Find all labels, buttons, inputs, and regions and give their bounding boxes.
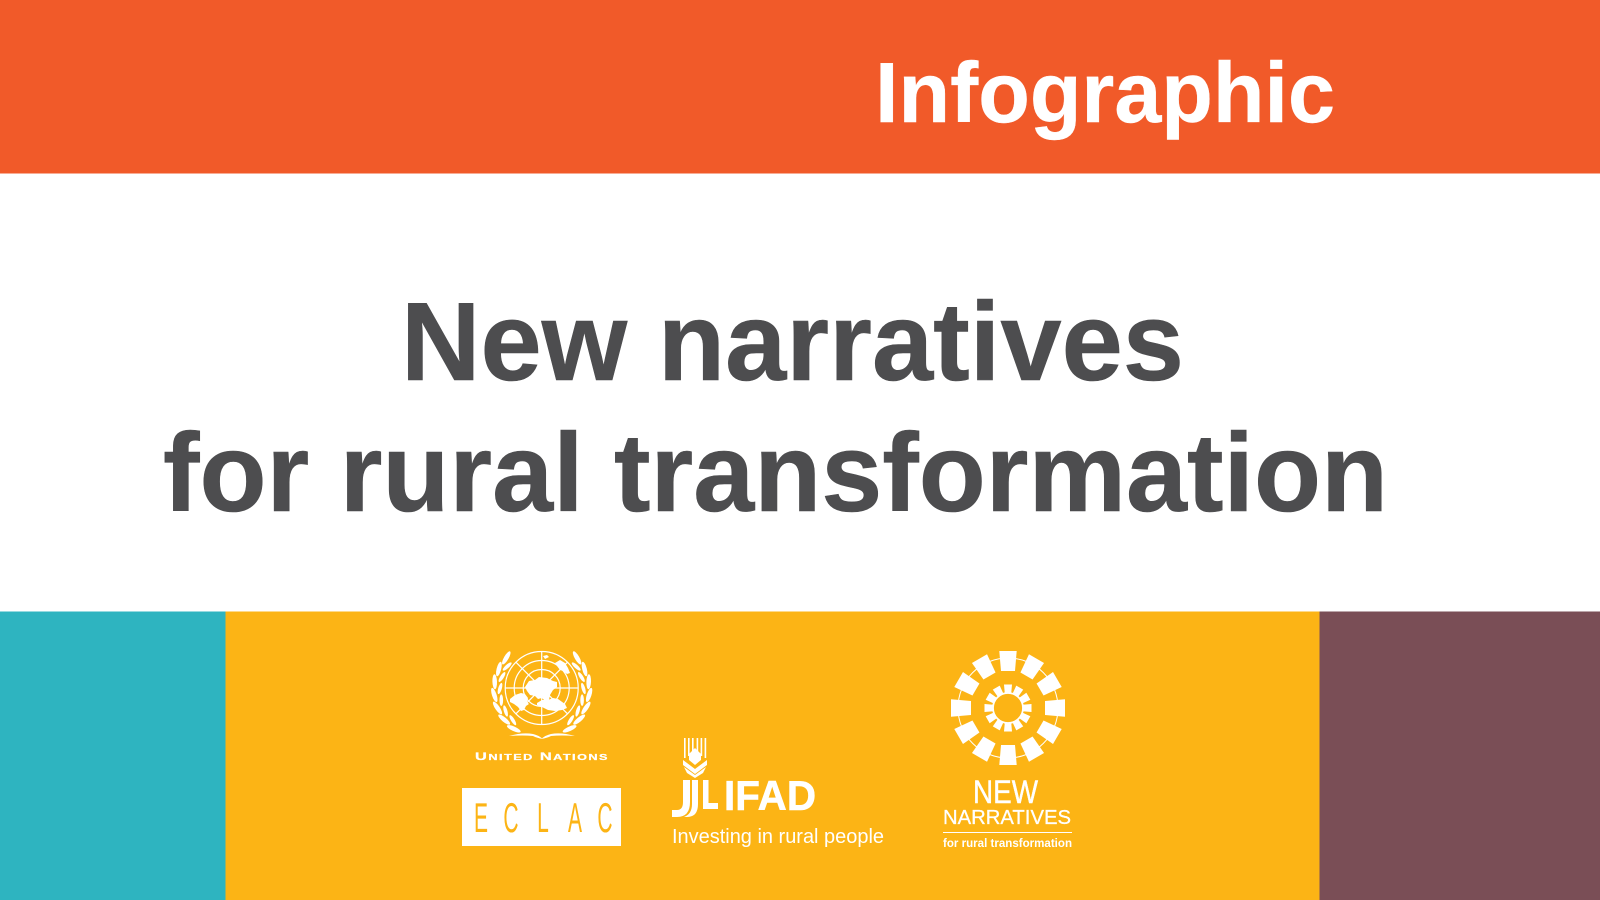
logo: New Narratives	[943, 651, 1072, 850]
panel: top orange banner	[0, 0, 1600, 174]
icon: ring of tiles	[951, 651, 1065, 765]
logo: IFAD	[672, 738, 884, 848]
text: IFAD: IFAD	[724, 772, 816, 819]
text: NARRATIVES: NARRATIVES	[943, 807, 1071, 829]
text: United Nations: U NITED N ATIONS	[475, 751, 609, 763]
title: New narratives for rural transformation: New narratives	[401, 280, 1184, 404]
text: ECLAC: ECLAC	[474, 795, 613, 842]
panel: yellow footer block	[226, 612, 1320, 900]
text: for rural transformation: for rural transformation	[943, 836, 1072, 850]
heading: Infographic: Infographic	[875, 46, 1335, 141]
panel: teal footer block	[0, 612, 226, 900]
logo: United Nations emblem	[475, 650, 609, 763]
title: New narratives for rural transformation: for rural transformation	[163, 411, 1388, 535]
text: NEW: NEW	[973, 774, 1039, 810]
logo: ECLAC	[462, 788, 621, 846]
icon: UN laurel wreath	[490, 650, 594, 739]
title: New narratives for rural transformation	[163, 280, 1388, 535]
icon: IFAD wheat ear	[683, 738, 707, 778]
icon: IFAD JL mark	[672, 780, 718, 817]
text: Investing in rural people: Investing in rural people	[672, 825, 884, 848]
panel: plum footer block	[1320, 612, 1600, 900]
icon: UN globe	[505, 652, 578, 724]
